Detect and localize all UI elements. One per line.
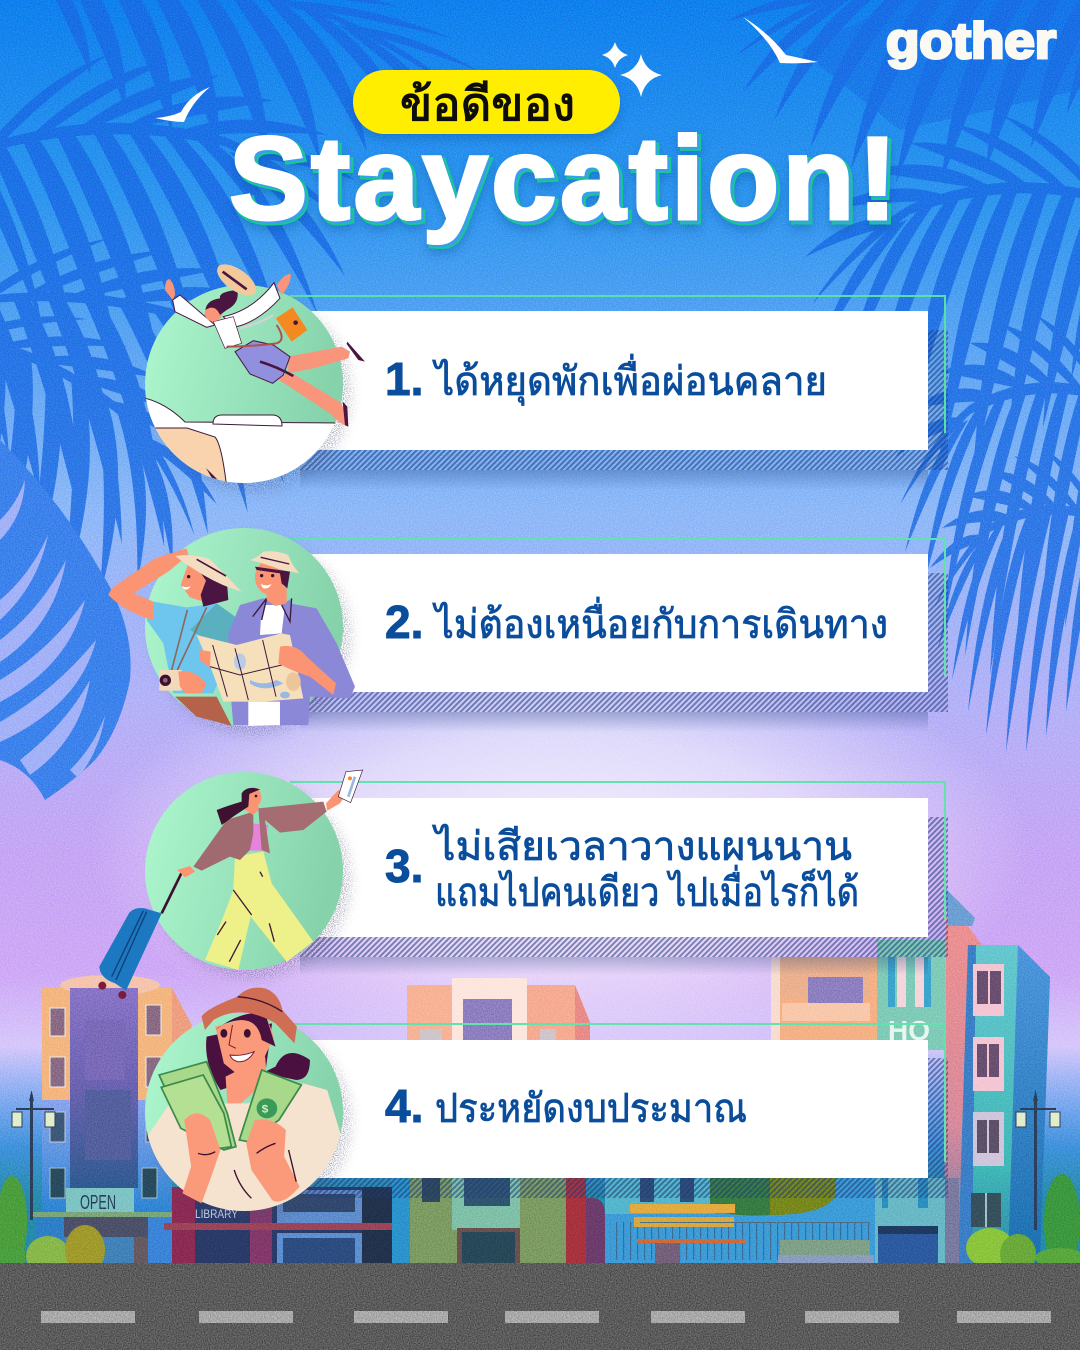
panel 2: no travel fatigue: ไม่ต้องเหนื่อยกับการเดินทาง (432, 597, 888, 647)
background buildings (0, 888, 1080, 1276)
palm shadow lower left (0, 440, 131, 800)
open sign: OPEN (80, 1192, 116, 1214)
bushes and trees (0, 1174, 1080, 1276)
street lamps (12, 1090, 1060, 1230)
icon: bird left (155, 87, 210, 122)
icon: sparkles (602, 42, 662, 97)
panel 3: no long planning: 3. (385, 840, 423, 892)
panel 4: save budget (290, 1024, 948, 1198)
panel 1: relax: ได้หยุดพักเพื่อผ่อนคลาย (432, 354, 827, 406)
illustration 4: woman holding money (145, 988, 351, 1220)
illustration 2: couple with map (108, 528, 355, 735)
library building: LIBRARY (195, 1207, 238, 1221)
palm leaves left (0, 0, 492, 660)
panel 2: no travel fatigue: 2. (385, 596, 423, 648)
illustration 4: woman holding money: $ (262, 1104, 269, 1116)
title: Staycation!: Staycation! (232, 116, 900, 248)
icon: bird right (743, 17, 818, 63)
title pill: ข้อดีของ: ข้อดีของ (400, 78, 575, 130)
title pill: ข้อดีของ (353, 70, 620, 134)
teal sign building: HO (888, 1015, 930, 1046)
panel 1: relax (290, 296, 948, 490)
left tall building (32, 975, 192, 1263)
illustration 3: woman with suitcase and ticket (98, 770, 363, 999)
road (0, 1263, 1080, 1350)
panel 3: no long planning: แถมไปคนเดียว ไปเมื่อไรก็ได้ (435, 865, 859, 915)
library building (164, 1187, 400, 1263)
open sign (66, 1188, 134, 1214)
panel 3: no long planning: ไม่เสียเวลาวางแผนนาน (432, 824, 852, 869)
panel 2: no travel fatigue (290, 539, 948, 732)
palm leaves right (725, 0, 1080, 752)
panel 1: relax: 1. (385, 353, 423, 405)
aqua building (958, 945, 1050, 1263)
right orange building (771, 957, 877, 1047)
logo: gother: gother (886, 13, 1056, 69)
panel 3: no long planning (290, 782, 948, 975)
teal sign building (877, 940, 945, 1050)
title: Staycation!: Staycation! (232, 116, 900, 248)
green and blue street row (392, 1178, 959, 1263)
pink tower (944, 918, 982, 1263)
panel 4: save budget: ประหยัดงบประมาณ (435, 1087, 747, 1131)
center peach building (407, 978, 590, 1045)
illustration 1: woman leaping onto bed (140, 258, 365, 492)
panel 4: save budget: 4. (385, 1080, 423, 1132)
title: Staycation!: Staycation! (229, 113, 897, 245)
